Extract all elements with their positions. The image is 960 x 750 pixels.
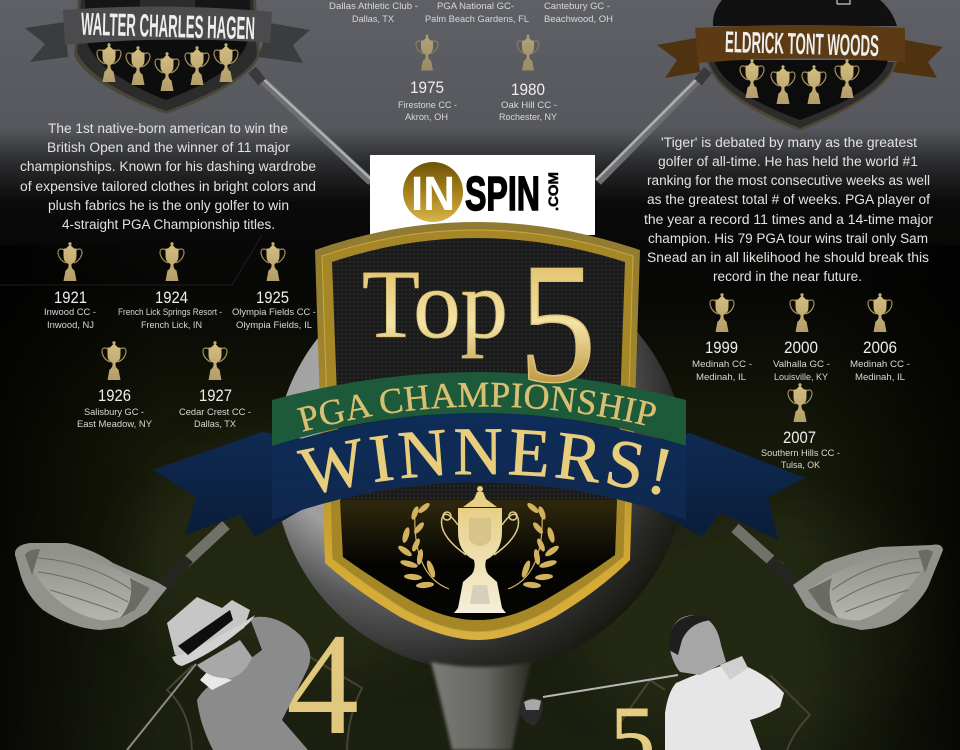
title: Winners: WINNERS! (296, 429, 669, 495)
win 1975: Firestone CC - (398, 100, 457, 111)
golf tee (431, 662, 531, 750)
Woods win 2006: 2006 (863, 339, 897, 357)
Woods win 2007 (761, 383, 840, 471)
Woods win 2000: Valhalla GC - (773, 359, 830, 370)
ribbon tails (657, 38, 943, 78)
hands (720, 656, 748, 680)
Woods win 1999 (692, 293, 752, 383)
club head (520, 698, 543, 726)
ribbon: blue band (272, 413, 686, 520)
Woods win 2000: 2000 (784, 339, 818, 357)
Woods win 2000 (773, 293, 830, 383)
Hagen win 1925 (232, 242, 316, 331)
Woods win 2000: Louisville, KY (774, 372, 829, 383)
Hagen win 1926: 1926 (98, 387, 131, 405)
text block: Hagen bio: plush fabrics he is the only golfer to win (48, 198, 289, 213)
text block: Woods bio: ranking for the most consecutive weeks as well (647, 173, 930, 188)
Woods win 1999: Medinah, IL (696, 372, 746, 383)
logo: InSpin.com: SPIN (465, 168, 540, 221)
text block: Woods bio: champion. His 79 PGA tour wins trail only Sam (648, 231, 928, 246)
panel: Walter Hagen badge: WALTER CHARLES HAGEN (81, 6, 255, 46)
Woods win 2007: Southern Hills CC - (761, 448, 840, 459)
icon: large trophy (442, 486, 518, 613)
Woods win 1999: Medinah CC - (692, 359, 752, 370)
win 1980: Oak Hill CC - (501, 100, 557, 111)
top centre venue captions: Dallas, TX (352, 14, 395, 25)
Woods win 2006: Medinah, IL (855, 372, 905, 383)
text block: Woods bio (644, 135, 934, 284)
text block: Woods bio: 'Tiger' is debated by many as the greatest (661, 135, 917, 150)
main title shield (315, 222, 640, 640)
Woods win 2007: Tulsa, OK (781, 460, 821, 471)
logo: InSpin.com (370, 155, 595, 235)
trophies (97, 43, 238, 91)
Hagen win 1924: 1924 (155, 289, 188, 307)
ribbon (695, 25, 905, 63)
head (669, 615, 726, 675)
Hagen win 1925: Olympia Fields, IL (236, 320, 312, 331)
text block: Hagen bio: of expensive tailored clothes in bright colors and (20, 179, 316, 194)
Hagen win 1921 (44, 242, 96, 331)
sweater (197, 617, 310, 750)
ribbon: green band (272, 372, 686, 446)
fourth-place badge outline (167, 657, 362, 750)
shirt collar (200, 672, 232, 690)
top centre venue captions: Beachwood, OH (544, 14, 613, 25)
Hagen win 1924 (118, 242, 222, 331)
text block: Woods bio: Snead an in all likelihood he should break this (647, 250, 929, 265)
logo gold circle (403, 162, 463, 222)
text block: Hagen bio (20, 121, 316, 232)
icon: right laurel (508, 501, 560, 589)
trophies (740, 59, 859, 104)
Hagen win 1927 (179, 341, 251, 430)
title: Top: Top (362, 251, 508, 358)
title: PGA Championship: PGA CHAMPIONSHIP (296, 382, 656, 432)
club: upper left to lower right (252, 70, 800, 590)
win 1980: 1980 (511, 81, 545, 99)
top centre venue captions (329, 1, 613, 25)
text block: Woods bio: record in the near future. (713, 269, 862, 284)
golfer: fifth place, white sweater (520, 615, 784, 750)
golf club (127, 664, 196, 750)
top centre venue captions: Cantebury GC - (544, 1, 610, 12)
Hagen win 1921: Inwood CC - (44, 307, 96, 318)
text block: Hagen bio: British Open and the winner of 11 major (47, 140, 291, 155)
top centre venue captions: Palm Beach Gardens, FL (425, 14, 529, 25)
win 1980 (499, 35, 558, 123)
win 1975: Akron, OH (405, 112, 448, 123)
win 1980: Rochester, NY (499, 112, 558, 123)
panel: Walter Hagen badge (25, 0, 310, 114)
ribbon tail: left (153, 432, 310, 537)
title: Winners (296, 429, 669, 495)
hat band (178, 610, 233, 655)
title: 5: 5 (519, 229, 596, 419)
driver head: right (793, 545, 943, 630)
Woods win 2006: Medinah CC - (850, 359, 910, 370)
Hagen win 1927: 1927 (199, 387, 232, 405)
text block: Woods bio: golfer of all-time. He has held the world #1 (658, 154, 918, 169)
Hagen win 1925: 1925 (256, 289, 289, 307)
text block: Hagen bio: The 1st native-born american to win the (48, 121, 288, 136)
win 1975 (398, 35, 457, 123)
text block: Woods bio: the year a record 11 times and a 14-time major (644, 212, 934, 227)
Woods win 2007: 2007 (783, 429, 816, 447)
face (197, 640, 252, 678)
top centre venue captions: Dallas Athletic Club - (329, 1, 418, 12)
Hagen win 1926 (77, 341, 153, 430)
driver head: left (15, 543, 167, 630)
Woods win 2006 (850, 293, 910, 383)
Hagen win 1925: Olympia Fields CC - (232, 307, 316, 318)
golf club shaft (543, 675, 678, 697)
Hagen win 1927: Cedar Crest CC - (179, 407, 251, 418)
text block: Woods bio: as the greatest total # of weeks. PGA player of (647, 192, 930, 207)
logo: InSpin.com: .COM (545, 172, 561, 211)
golfer: fourth place, hat and sweater (127, 597, 310, 750)
icon: left laurel (397, 501, 449, 589)
Hagen win 1926: Salisbury GC - (84, 407, 144, 418)
sweater (665, 662, 784, 750)
hat brim (172, 615, 255, 666)
ribbon tail: right (650, 433, 805, 540)
logo: InSpin.com: IN (411, 168, 455, 221)
hair (669, 615, 712, 655)
top centre venue captions: PGA National GC- (437, 1, 514, 12)
ribbon tails (25, 22, 310, 63)
Hagen win 1921: Inwood, NJ (47, 320, 94, 331)
Woods win 1999: 1999 (705, 339, 738, 357)
Hagen win 1926: East Meadow, NY (77, 419, 153, 430)
text block: Hagen bio: championships. Known for his dashing wardrobe (20, 159, 316, 174)
ribbon (63, 6, 272, 45)
Hagen win 1924: French Lick, IN (141, 320, 202, 331)
Hagen win 1927: Dallas, TX (194, 419, 237, 430)
golf ball (274, 259, 686, 671)
Hagen win 1924: French Lick Springs Resort - (118, 307, 222, 318)
win 1975: 1975 (410, 79, 444, 97)
fifth-place badge outline (617, 675, 810, 750)
club: upper right to lower left (160, 70, 708, 590)
hat crown (167, 597, 250, 662)
text block: Hagen bio: 4-straight PGA Championship titles. (62, 217, 275, 232)
panel: Tiger Woods badge (657, 0, 943, 131)
Hagen win 1921: 1921 (54, 289, 87, 307)
